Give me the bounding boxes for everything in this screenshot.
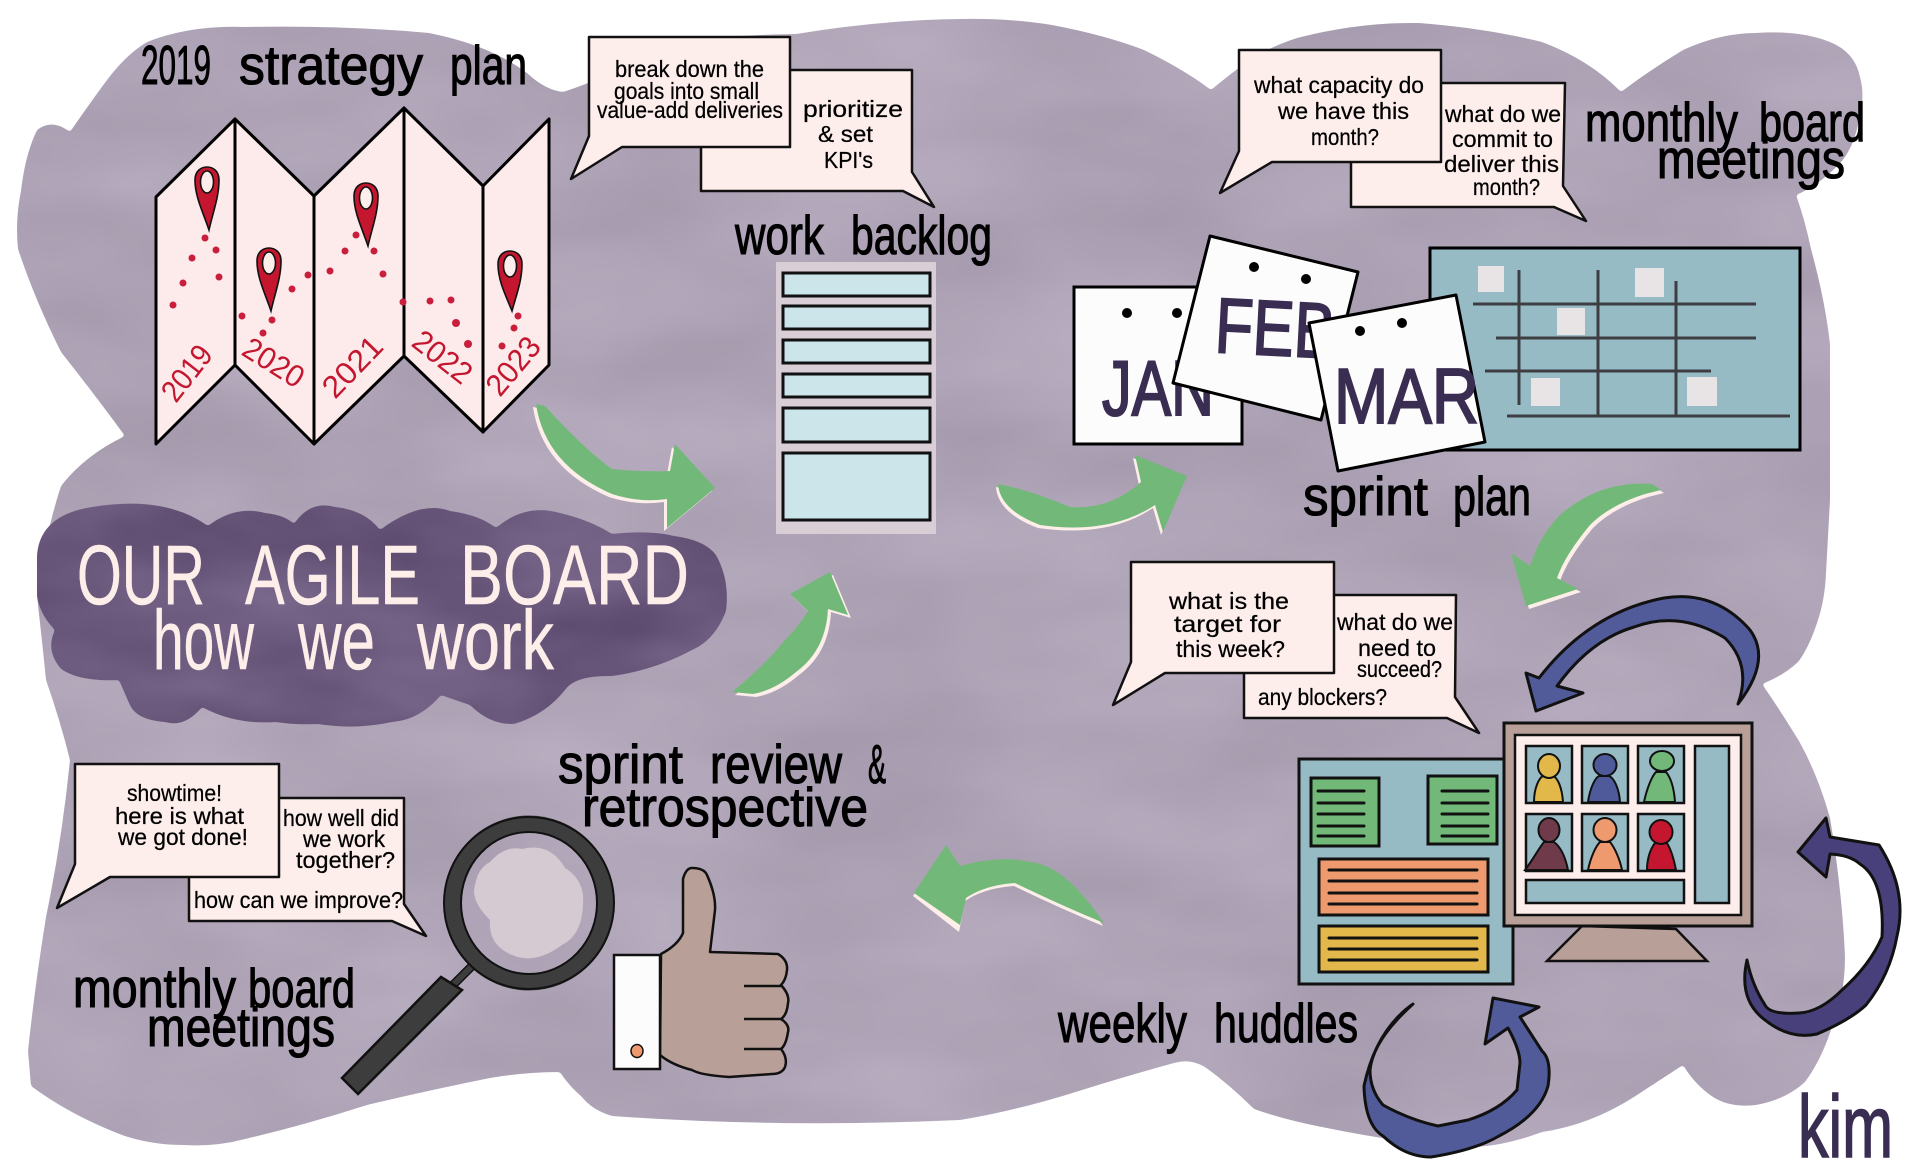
title text [77,528,689,687]
heading: monthly board meetings (top): board [1759,91,1865,153]
heading: sprint review and retrospective: review [710,733,842,795]
heading: monthly board meetings (top): meetings [1657,128,1845,190]
year labels: 2022 [406,323,479,391]
participant tiles [1525,746,1684,871]
loop arrow: right [1745,818,1900,1035]
callouts: showtime and retrospective questions: how well did [283,805,399,831]
callouts: break down goals and prioritize: KPI's [824,147,873,173]
callouts: break down goals and prioritize: prioritize [803,96,903,122]
heading: weekly huddles: huddles [1214,992,1358,1054]
bottom bar [1526,880,1684,903]
year labels: 2023 [479,329,548,402]
callouts: showtime and retrospective questions: how can we improve? [194,887,403,913]
callouts: weekly target, needs and blockers: what is the [1168,588,1289,614]
yellow card [1319,926,1488,972]
heading: 2019 strategy plan [141,34,527,96]
month sheet: MAR: MAR [1334,352,1479,440]
backlog list [776,262,936,534]
month sheet: MAR [1309,295,1485,471]
title text: how [153,593,254,687]
side panel [1695,746,1729,903]
callouts: monthly capacity and commitment: what do we [1444,101,1561,127]
arrow: sprint plan to weekly huddles [1511,484,1664,609]
loop arrow: top [1526,597,1759,711]
heading: 2019 strategy plan: plan [450,34,527,96]
heading: sprint plan: sprint [1303,465,1428,527]
heading: monthly board meetings (bottom) [73,957,355,1058]
heading: work backlog: work [734,204,824,266]
title text: we [297,593,375,687]
heading: sprint review and retrospective: sprint [558,733,683,795]
callouts: monthly capacity and commitment: deliver this [1444,151,1559,177]
callouts: showtime and retrospective questions: showtime! [127,780,222,806]
year labels: 2019 [154,338,220,408]
heading: work backlog: backlog [851,204,992,266]
callouts: weekly target, needs and blockers: target for [1174,611,1281,637]
callouts: monthly capacity and commitment: what capacity do [1253,72,1424,98]
heading: monthly board meetings (bottom): meetings [147,996,335,1058]
heading: sprint review and retrospective [558,733,886,838]
heading: 2019 strategy plan: strategy [239,34,423,96]
callouts: break down goals and prioritize: break down the [615,56,764,82]
callouts: showtime and retrospective questions [57,764,426,936]
map pins [195,167,522,311]
month sheet: FEB: FEB [1213,281,1338,375]
callouts: break down goals and prioritize: value-add deliveries [597,97,783,123]
callouts: weekly target, needs and blockers [1113,562,1479,733]
arrow: backlog to sprint plan [996,455,1187,535]
callouts: monthly capacity and commitment: we have this [1277,98,1409,124]
icon: thumbs up [614,868,788,1077]
title text: BOARD [460,528,689,622]
month sheet: JAN [1074,287,1242,444]
callouts: weekly target, needs and blockers: this week? [1176,636,1285,662]
heading: monthly board meetings (top) [1585,91,1865,190]
year labels [154,323,548,408]
callouts: break down goals and prioritize [571,37,934,207]
callouts: showtime and retrospective questions: together? [296,847,395,873]
callouts: monthly capacity and commitment: month? [1311,124,1379,150]
month sheet: JAN: JAN [1102,344,1214,432]
heading: monthly board meetings (bottom): monthly [73,957,236,1019]
callouts: weekly target, needs and blockers: any blockers? [1258,684,1387,710]
callouts: monthly capacity and commitment [1220,50,1586,221]
heading: sprint plan: plan [1453,465,1531,527]
callouts: showtime and retrospective questions: we got done! [117,824,248,850]
year labels: 2020 [236,330,311,395]
heading: sprint review and retrospective: retrospective [582,776,868,838]
green cards [1311,776,1497,846]
callouts: weekly target, needs and blockers: what do we [1336,609,1453,635]
heading: monthly board meetings (bottom): board [248,957,355,1019]
video-call monitor [1504,723,1752,961]
arrow: huddles to review [913,845,1104,932]
arrow: roadmap to backlog [533,404,715,531]
title text: OUR [77,528,205,622]
callouts: showtime and retrospective questions: here is what [115,803,245,829]
callouts: monthly capacity and commitment: commit to [1452,126,1553,152]
shirt cuff [614,955,660,1069]
title text: AGILE [245,528,420,622]
heading: weekly huddles: weekly [1057,992,1187,1054]
fold-out roadmap [154,108,549,444]
kanban board [1299,759,1513,984]
sprint planning board [1430,248,1800,450]
route dots [170,232,522,350]
title text: work [416,593,555,687]
month sheet: FEB [1173,236,1358,420]
orange card [1319,859,1488,915]
text: & [868,733,886,795]
callouts: weekly target, needs and blockers: succeed? [1357,656,1442,682]
loop arrow: bottom [1364,998,1549,1157]
icon: magnifying glass [342,817,614,1094]
heading: sprint plan [1303,465,1531,527]
callouts: break down goals and prioritize: goals into small [614,78,759,104]
callouts: break down goals and prioritize: & set [818,121,874,147]
callouts: weekly target, needs and blockers: need to [1358,635,1436,661]
callouts: showtime and retrospective questions: we work [302,826,385,852]
title cloud [37,504,727,727]
heading: weekly huddles [1057,992,1358,1054]
heading: work backlog [734,204,992,266]
year labels: 2021 [315,329,390,405]
arrow: review to backlog [732,572,851,697]
heading: monthly board meetings (top): monthly [1585,91,1738,153]
heading: 2019 strategy plan: 2019 [141,34,211,96]
callouts: monthly capacity and commitment: month? [1473,174,1540,200]
